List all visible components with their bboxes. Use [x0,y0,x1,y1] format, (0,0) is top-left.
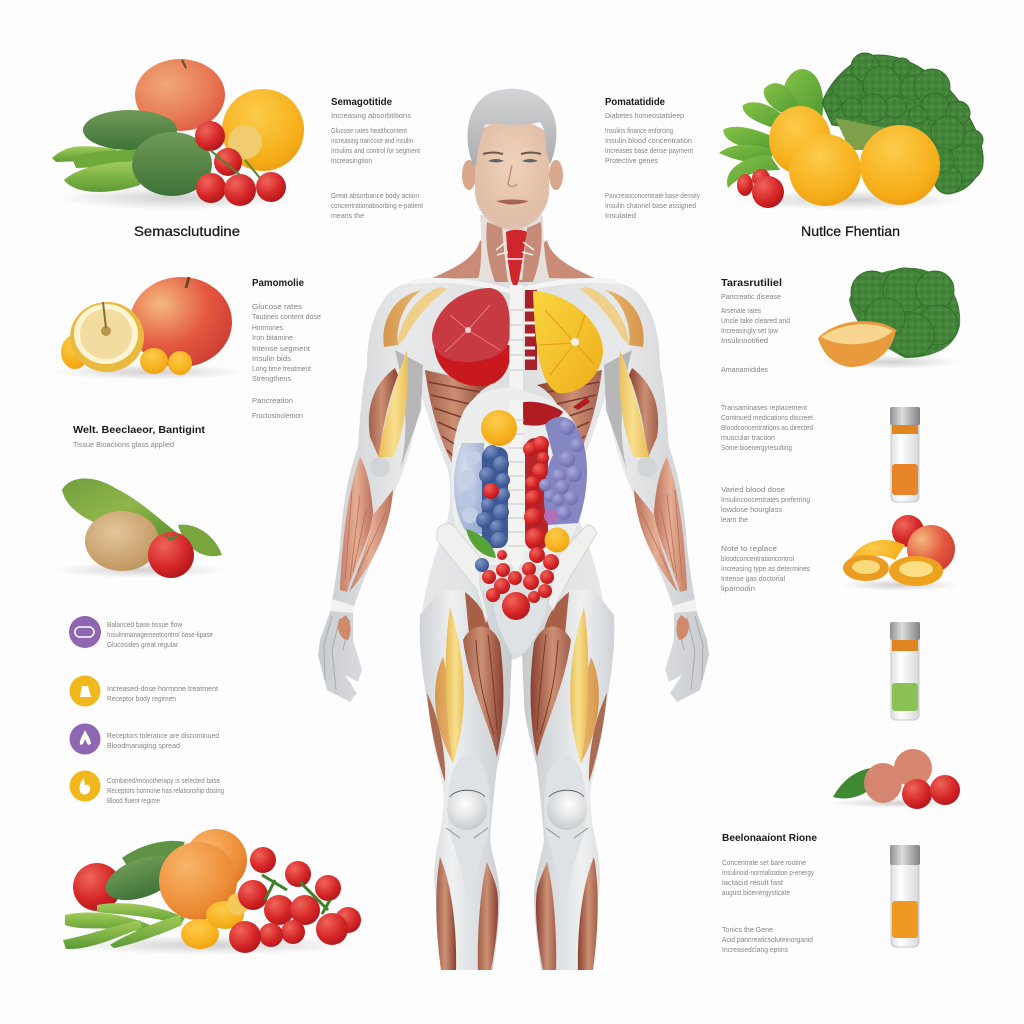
text block: Pamomelie: Long time treatment [252,366,311,373]
text block: Weight Reduction: Tissue Bioactions glass applied [73,442,174,449]
text block: Beelonasiont Hone: Acid pancreaticsoluteinorganid [722,937,813,944]
text block: Weight Reduction [73,425,206,449]
text block: Beelonasiont Hone: Concentrate set bare routine [722,860,806,867]
red lung [432,288,511,386]
yellow pepper [544,528,570,552]
list: purple icon one: Balanced base tissue flow [107,622,183,629]
nose [508,165,517,186]
head [462,89,563,230]
list: yellow icon two: Increased-dose hormone treatment [107,686,218,693]
text block: Beelonasiont Hone: Increasedclang eptins [722,947,788,954]
list: yellow icon four: Combined/monotherapy is selected base [107,778,220,785]
text block: Pomatotide: Insulin channel base assigned [605,203,696,210]
fruit group: broccoli and citrus half [818,268,960,369]
broccoli [822,53,983,194]
ears [462,160,476,190]
text block: Pamomelie: Strengthens [252,376,292,383]
text block: Pomatotide: Insulins finance enforcing [605,128,673,135]
bladder plate [493,600,547,653]
text block: vitamin details: lipamodin [721,586,755,593]
trachea [506,230,527,290]
text block: therapy details: Bloodconcentrations as directed [721,425,813,432]
spine column lower [508,400,524,575]
text block: Semagotide: Increasingtion [331,158,372,165]
text block: Beelonasiont Hone: Insulinoid-normalization p-energy [722,870,814,877]
text block: therapy details: Continued medications discreet [721,415,813,422]
text block: Pamomelie: Insulin bids [252,356,292,363]
text block: Pomatotide: Pancreasconcentrate base density [605,193,700,200]
test tube two [890,622,920,720]
organ: yellow ball [481,410,517,446]
list: yellow icon four: Blood fluent regime [107,798,160,805]
test tube three [890,845,920,947]
text block: Semagotide: means the [331,213,364,220]
berries: red column [523,436,549,548]
text block: Beelonasiont Hone: Beelonaaiont Rione [722,833,817,844]
text block: Semagotide: Increasing trancose and insulin [331,138,413,145]
text block: therapy details: muscular traction [721,435,775,442]
text block: Beelonasiont Hone: Tonics the Gene [722,927,773,934]
text block: Tamaratiliel: Amanamidides [721,367,768,374]
pelvis [437,523,597,622]
list: yellow icon four [70,770,224,805]
text block: vitamin details: learn the [721,517,748,524]
text block: Tamaratiliel: Tarasrutiliel [721,278,782,289]
hair [467,89,556,167]
text block: vitamin details: Insulinconcentrates preferring [721,497,810,504]
organ backdrops [482,417,587,550]
berries: purple [539,419,584,520]
text block: Semagotide: Glucose rates healthcontent [331,128,407,135]
text block: Pamomelie: Iron bitamine [252,335,293,342]
text block: vitamin details: Varied blood dose [721,487,785,494]
text block: vitamin details: lowdose hourglass [721,507,783,514]
fruit group: bottom left produce [60,829,361,955]
text block: Pamomelie: Fructosinolemon [252,413,303,420]
fruit group: cucumber melon tomato [55,478,225,578]
list: purple icon one [69,616,213,649]
berries: lower red cluster [482,547,559,620]
abdomen cavity [451,387,585,565]
text block: Pomatotide: Protective genes [605,158,658,165]
organ: pale gut left [454,443,484,535]
legs [420,590,614,970]
text block: Pamomelie: Pamomolie [252,278,304,289]
text block: Pomatotide [605,97,700,220]
text block: Tamaratiliel: Arsenate rates [721,308,761,315]
yellow lung [533,291,603,393]
heading: Nutlce Fhentian: Nutlce Fhentian [801,223,900,239]
text block: Pomatotide: Insulin blood concentration [605,138,692,145]
text block: Tamaratiliel [721,278,790,374]
face [475,121,549,230]
text block: Beelonasiont Hone [722,833,817,954]
text block: Pamomelie [252,278,321,420]
test tube one [890,407,920,502]
text block: Pamomelie: Glucose rates [252,304,303,311]
organ: liver [518,402,563,426]
heading: Semasclutudine: Semasclutudine [134,223,240,239]
text block: Pomatotide: Insulated [605,213,636,220]
fruit group: figs and cherries [830,749,960,809]
text block: Semagotide [331,97,423,220]
text block: Tamaratiliel: Insulinnotified [721,338,768,345]
text block: vitamin details: Note to replace [721,546,777,553]
text block: Tamaratiliel: Uncle take cleared and [721,318,790,325]
text block: Pamomelie: Tautines content dose [252,314,321,321]
text block: Semagotide: Semagotitide [331,97,392,108]
text block: Pomatotide: Increases base dense payment [605,148,693,155]
fruit group: top left produce [52,59,304,210]
text block: Pomatotide: Diabetes homeostatsleep [605,113,684,120]
list: purple icon one: Insulinmanagementcontrol base-lipase [107,632,213,639]
text block: Pamomelie: Pancreation [252,398,293,405]
leaf [466,529,496,558]
fruit group: apple and citrus [55,277,245,380]
spine and ribs [508,285,537,575]
torso and arms [318,222,709,702]
fruit group: top right produce [719,53,983,210]
text block: Beelonasiont Hone: lactacid result fast [722,880,783,887]
text block: vitamin details: Increasing type as determines [721,566,810,573]
text block: Pomatotide: Pomatatidide [605,97,665,108]
list: purple icon three: Receptors tolerance are discontinued [107,733,219,740]
clavicles [412,280,615,291]
mouth [496,200,529,204]
list: purple icon three: Bloodmanaging spread [107,743,180,750]
list: purple icon three [70,724,219,754]
berries: blue [476,445,510,548]
text block: Weight Reduction: Welt. Beeclaeor, Bantigint [73,425,206,436]
text block: therapy details: Some bioenergyresulting [721,445,792,452]
text block: Tamaratiliel: Pancreatic disease [721,294,781,301]
human body figure [318,89,709,970]
text block: therapy details: Transaminases replacement [721,405,807,412]
text block: Pamomelie: Hormones [252,325,283,332]
text block: Semagotide: concentrationabsorbing e-patient [331,203,423,210]
fruit group: peppers and orange [840,515,960,591]
text block: Semagotide: Insulins and control for segment [331,148,420,155]
list: purple icon one: Glucosides great regular [107,642,179,649]
text block: Beelonasiont Hone: august bioenergysticate [722,890,790,897]
text block: vitamin details: bloodconcentrationcontrol [721,556,794,563]
text block: vitamin details [721,487,810,593]
list: yellow icon four: Receptors hormone has relationship dosing [107,788,224,795]
neck [478,215,550,280]
brows [483,152,541,154]
text block: Semagotide: Great absorbance body action [331,193,419,200]
text block: vitamin details: Intense gas doctorial [721,576,785,583]
text block: therapy details [721,405,813,452]
text block: Tamaratiliel: Increasingly set low [721,328,779,335]
eyes [488,159,538,162]
list: yellow icon two: Receptor body regimen [107,696,176,703]
text block: Semagotide: Increasing absorbtitions [331,113,412,120]
text block: Pamomelie: Intense segment [252,346,310,353]
list: yellow icon two [70,676,218,706]
